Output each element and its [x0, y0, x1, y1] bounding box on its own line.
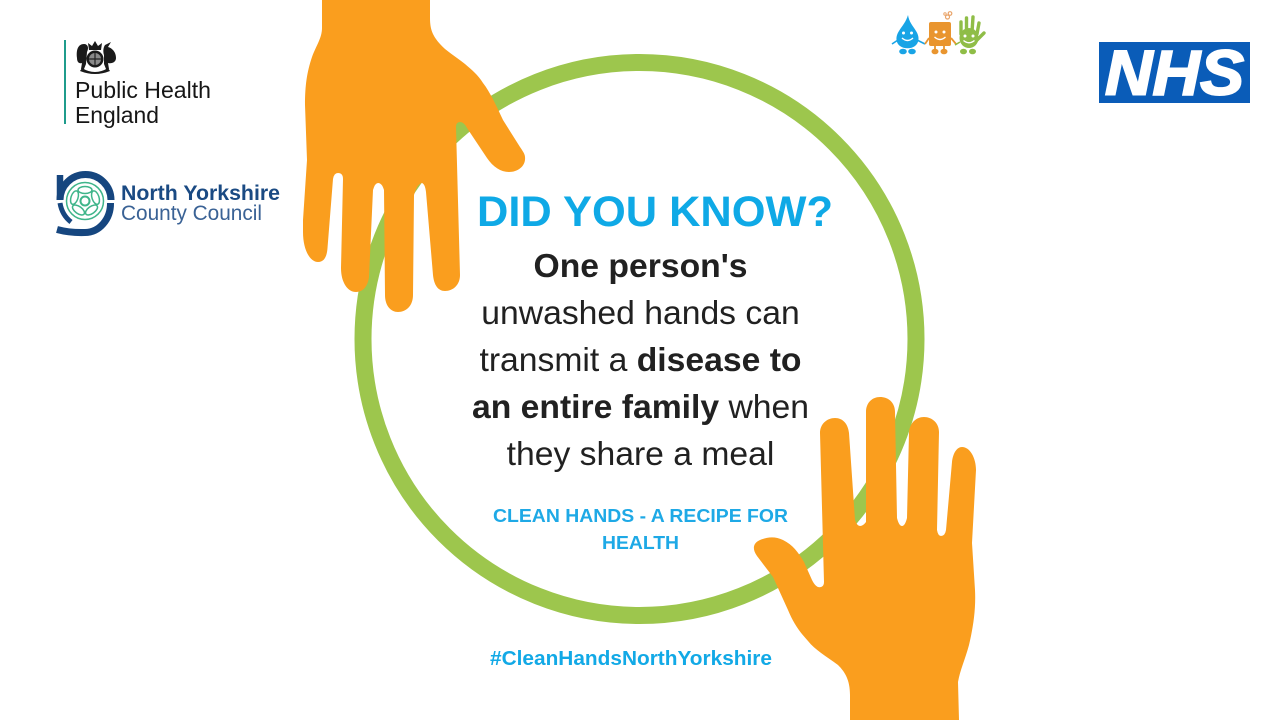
- text block: main message: unwashed hands can: [481, 294, 800, 332]
- logo: Public Health England: [64, 40, 211, 128]
- icon: soap character: [925, 12, 956, 54]
- text block: campaign strapline: CLEAN HANDS - A RECIPE FOR: [493, 505, 788, 526]
- label: North Yorkshire: North Yorkshire: [121, 182, 280, 205]
- label: Public Health: Public Health: [75, 77, 211, 103]
- icon: bottom orange hand: [754, 397, 976, 720]
- text block: main message: One person's: [534, 247, 747, 285]
- icon: hand character: [955, 17, 984, 54]
- green ring: [363, 62, 916, 616]
- text block: main message: transmit a disease to: [479, 341, 802, 379]
- label: England: England: [75, 102, 159, 128]
- logo: campaign characters: [892, 12, 984, 54]
- icon: council ring: [57, 175, 111, 233]
- icon: white rose: [66, 182, 104, 220]
- heading: did you know: DID YOU KNOW?: [477, 188, 833, 236]
- text block: campaign strapline: HEALTH: [602, 532, 679, 553]
- text block: main message: [472, 247, 809, 473]
- logo: NHS: [1099, 38, 1250, 108]
- icon: top orange hand: [303, 0, 525, 312]
- text block: main message: an entire family when: [472, 388, 809, 426]
- icon: water drop character: [892, 15, 925, 54]
- label: NHS: NHS: [1105, 38, 1244, 108]
- logo: North Yorkshire County Council: [57, 175, 280, 233]
- icon: royal crest: [77, 41, 116, 74]
- hashtag: #CleanHandsNorthYorkshire: [490, 647, 772, 670]
- text block: campaign strapline: [493, 505, 788, 553]
- label: County Council: County Council: [121, 202, 262, 225]
- text block: main message: they share a meal: [507, 435, 774, 473]
